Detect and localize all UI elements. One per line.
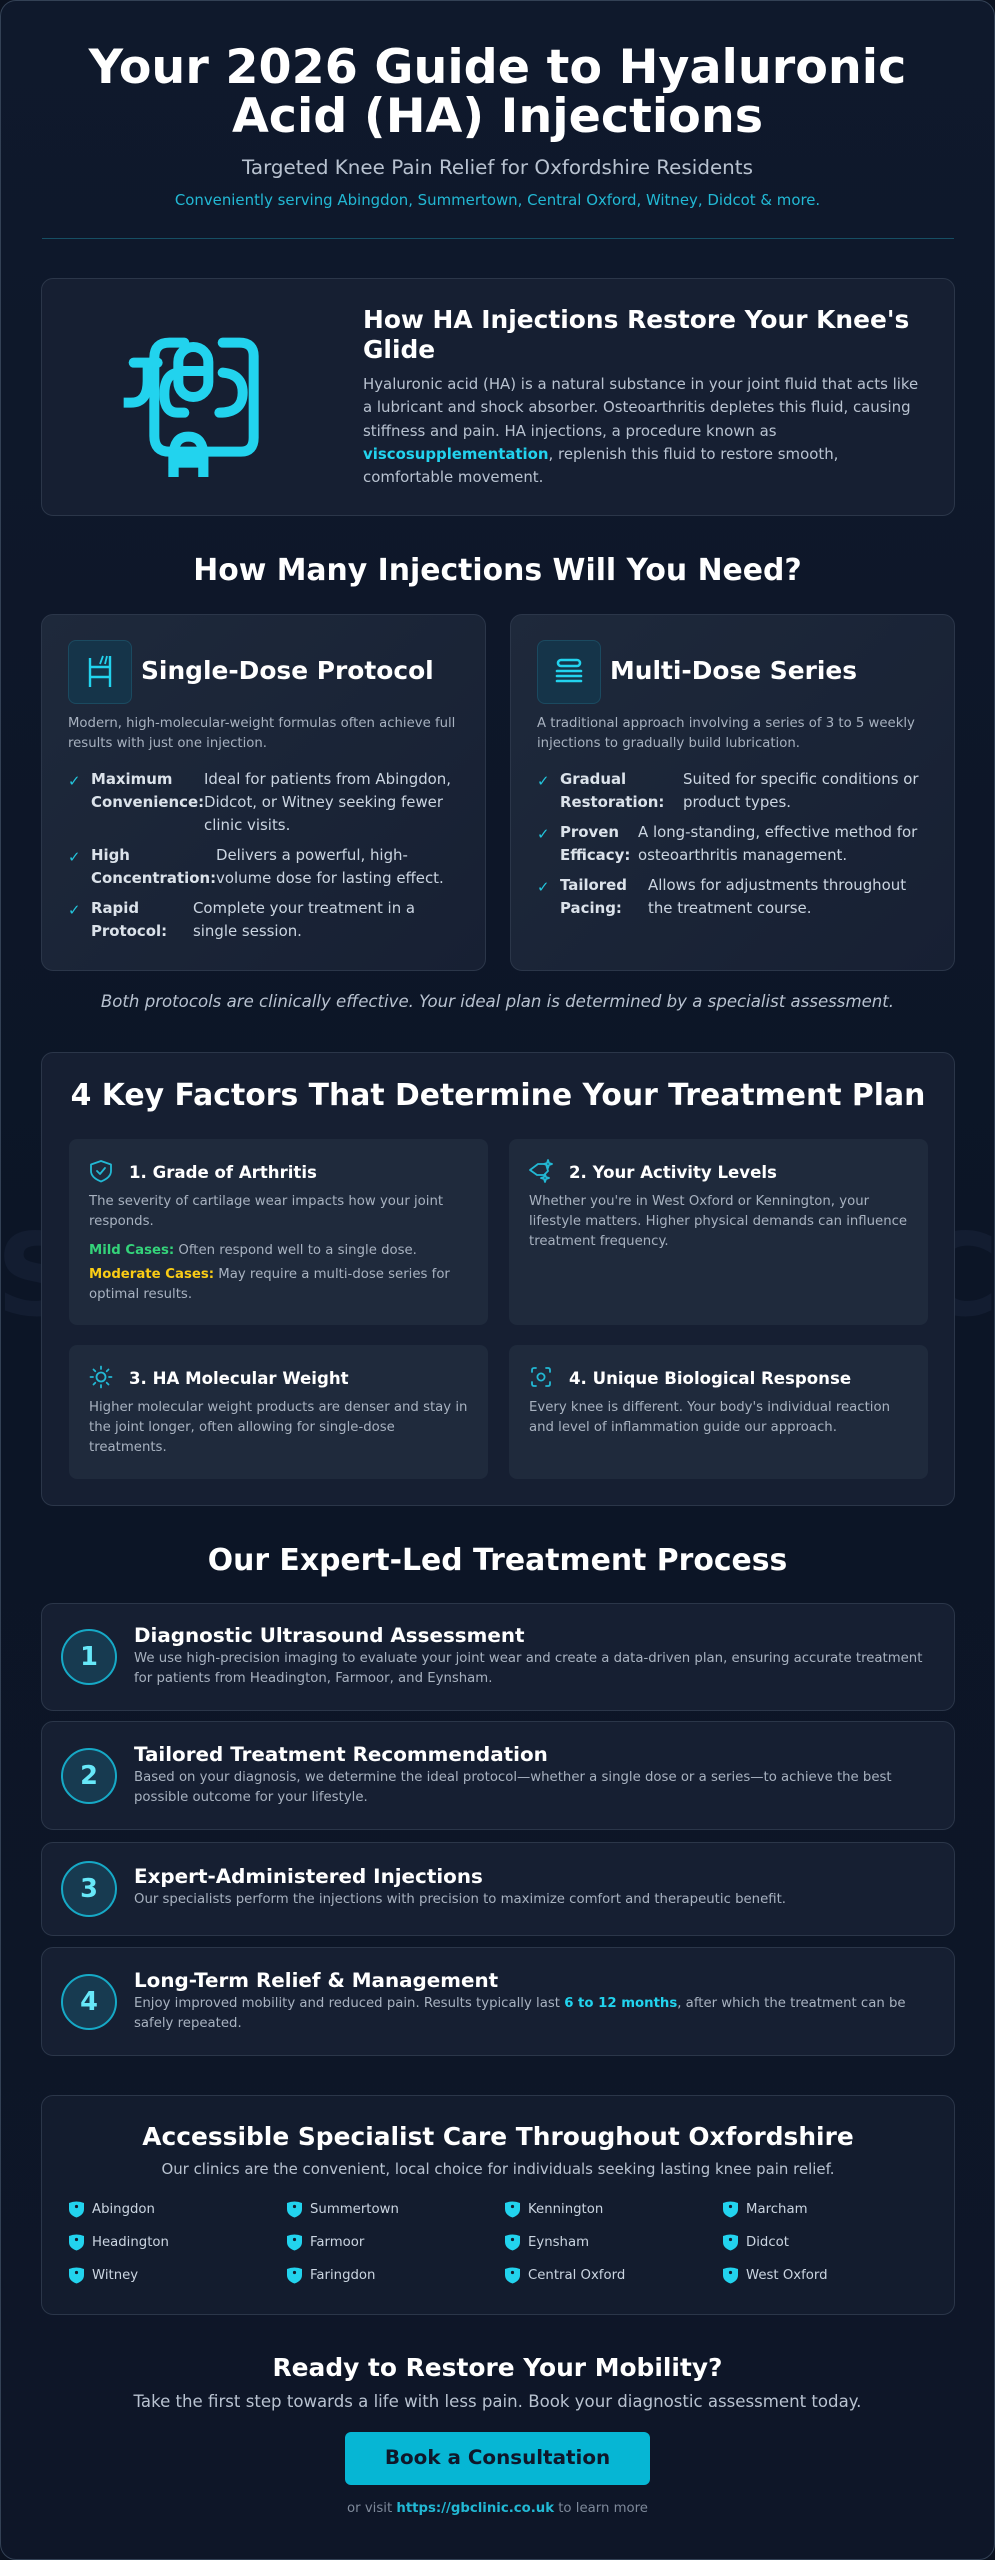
factor 4: biological response: Every knee is different. Your body's individual reaction [529, 1400, 890, 1415]
icon: molecule sun [90, 1366, 112, 1388]
factor 4: biological response: 4. Unique Biological Response [569, 1369, 851, 1388]
location: Marcham: Marcham [746, 2202, 808, 2217]
card title: Multi-Dose Series [610, 656, 857, 685]
panel heading: How HA Injections Restore Your Knee's [363, 305, 909, 334]
step text: We use high-precision imaging to evaluate your joint wear and create a data-driven plan, ensuring accurate treatment [134, 1651, 922, 1666]
factor 2: activity levels: treatment frequency. [529, 1234, 669, 1249]
factor 1: grade of arthritis: Mild Cases: Often respond well to a single dose. [89, 1243, 417, 1258]
location: Faringdon: Faringdon [310, 2268, 375, 2283]
benefit: proven efficacy: Proven [560, 823, 619, 841]
benefit: rapid protocol [68, 899, 415, 940]
step number [61, 1974, 117, 2030]
card description: injections to gradually build lubrication. [537, 736, 800, 751]
location: Witney: Witney [92, 2268, 138, 2283]
location: Didcot [723, 2234, 789, 2250]
step text: Enjoy improved mobility and reduced pain. Results typically last 6 to 12 months, after which the treatment can be [134, 1996, 906, 2011]
factor 4: biological response: and level of inflammation guide our approach. [529, 1420, 837, 1435]
benefit: gradual restoration: ✓ [537, 772, 550, 790]
location: Central Oxford: Central Oxford [528, 2268, 625, 2283]
benefit: rapid protocol: Complete your treatment in a [193, 899, 415, 917]
benefit: proven efficacy [537, 823, 918, 864]
panel: multi-dose series [510, 614, 955, 971]
step text: safely repeated. [134, 2016, 242, 2031]
panel heading: 4 Key Factors That Determine Your Treatment Plan [71, 1078, 925, 1113]
benefit: gradual restoration: Gradual [560, 770, 626, 788]
step title: Long-Term Relief & Management [134, 1969, 498, 1992]
factor 4: biological response [509, 1345, 928, 1479]
step number: 1 [80, 1642, 98, 1672]
step text: possible outcome for your lifestyle. [134, 1790, 368, 1805]
benefit: gradual restoration: Restoration: [560, 793, 664, 811]
step 4 [41, 1947, 955, 2056]
factor 1: grade of arthritis: The severity of cartilage wear impacts how your joint [89, 1194, 443, 1209]
factor 2: activity levels: lifestyle matters. Higher physical demands can influence [529, 1214, 907, 1229]
benefit: maximum convenience [68, 770, 451, 834]
step number: 2 [80, 1761, 98, 1791]
footer link text: or visit https://gbclinic.co.uk to learn more [347, 2501, 648, 2516]
step text: for patients from Headington, Farmoor, and Eynsham. [134, 1671, 492, 1686]
benefit: proven efficacy: A long-standing, effective method for [638, 823, 917, 841]
location: Headington: Headington [92, 2235, 169, 2250]
panel: how HA injections work [41, 278, 955, 516]
step number [61, 1748, 117, 1804]
location: Eynsham: Eynsham [528, 2235, 589, 2250]
benefit: high concentration: volume dose for lasting effect. [216, 869, 444, 887]
title: Acid (HA) Injections [232, 89, 763, 144]
benefit: high concentration: ✓ [68, 848, 81, 866]
benefit: maximum convenience: ✓ [68, 772, 81, 790]
factor 3: molecular weight: Higher molecular weight products are denser and stay in [89, 1400, 467, 1415]
factor 1: grade of arthritis: optimal results. [89, 1287, 192, 1302]
location: Eynsham [505, 2234, 589, 2250]
step text [134, 1651, 922, 1686]
panel heading [363, 305, 909, 364]
step title: Expert-Administered Injections [134, 1865, 483, 1888]
step title: Diagnostic Ultrasound Assessment [134, 1624, 525, 1647]
step text: Our specialists perform the injections with precision to maximize comfort and therapeutic benefit. [134, 1892, 786, 1907]
step 3 [41, 1842, 955, 1936]
card description [68, 716, 455, 751]
benefit: tailored pacing: Allows for adjustments throughout [648, 876, 906, 894]
benefit: tailored pacing: Tailored [560, 876, 627, 894]
step text: Based on your diagnosis, we determine the ideal protocol—whether a single dose or a series—to achieve the best [134, 1770, 892, 1785]
icon: knee joint [124, 338, 259, 477]
card description: results with just one injection. [68, 736, 267, 751]
factor 1: grade of arthritis [69, 1139, 488, 1325]
panel body text: a lubricant and shock absorber. Osteoarthritis depletes this fluid, causing [363, 398, 911, 416]
step number [61, 1861, 117, 1917]
location: Witney [69, 2268, 138, 2284]
step 2 [41, 1721, 955, 1830]
watermark letters [1, 1209, 994, 1342]
button: book a consultation [345, 2432, 650, 2485]
location: West Oxford: West Oxford [746, 2268, 828, 2283]
panel body text: stiffness and pain. HA injections, a procedure known as [363, 422, 777, 440]
card title: Single-Dose Protocol [141, 656, 434, 685]
benefit: maximum convenience: Ideal for patients from Abingdon, [204, 770, 451, 788]
benefit: maximum convenience: Convenience: [91, 793, 204, 811]
panel body text: Hyaluronic acid (HA) is a natural substance in your joint fluid that acts like [363, 375, 918, 393]
panel heading: Accessible Specialist Care Throughout Oxfordshire [142, 2122, 854, 2151]
panel: key factors [41, 1052, 955, 1506]
benefit: high concentration: High [91, 846, 130, 864]
panel body text: viscosupplementation, replenish this fluid to restore smooth, [363, 445, 838, 463]
step text [134, 1770, 892, 1805]
button: book a consultation: Book a Consultation [385, 2446, 610, 2469]
benefit: maximum convenience: Maximum [91, 770, 172, 788]
note: both protocols: Both protocols are clinically effective. Your ideal plan is determined by a specialist assessment. [101, 992, 894, 1011]
panel heading: Glide [363, 335, 435, 364]
benefit: rapid protocol: Rapid [91, 899, 139, 917]
subtitle: Targeted Knee Pain Relief for Oxfordshire Residents [242, 156, 753, 179]
step 1 [41, 1603, 955, 1711]
step number: 4 [80, 1987, 98, 2017]
benefit: proven efficacy: osteoarthritis management. [638, 846, 847, 864]
benefit: rapid protocol: ✓ [68, 901, 81, 919]
step title: Tailored Treatment Recommendation [134, 1743, 548, 1766]
location: Abingdon [69, 2202, 155, 2218]
panel: locations [41, 2095, 955, 2315]
factor 3: molecular weight: the joint longer, often allowing for single-dose [89, 1420, 395, 1435]
card description: A traditional approach involving a series of 3 to 5 weekly [537, 716, 915, 731]
step number [61, 1629, 117, 1685]
heading: how many injections: How Many Injections Will You Need? [193, 553, 802, 588]
location: Abingdon: Abingdon [92, 2202, 155, 2217]
location: Didcot: Didcot [746, 2235, 789, 2250]
heading: treatment process: Our Expert-Led Treatment Process [208, 1543, 787, 1578]
factor 3: molecular weight: treatments. [89, 1440, 167, 1455]
service area line: Conveniently serving Abingdon, Summertown, Central Oxford, Witney, Didcot & more. [175, 191, 820, 209]
factor 1: grade of arthritis: Moderate Cases: May require a multi-dose series for [89, 1267, 450, 1282]
icon: scan focus [531, 1367, 551, 1387]
factor 2: activity levels: Whether you're in West Oxford or Kennington, your [529, 1194, 869, 1209]
location: Farmoor: Farmoor [310, 2235, 364, 2250]
panel subtext: Our clinics are the convenient, local choice for individuals seeking lasting knee pain relief. [161, 2160, 835, 2178]
location: Kennington: Kennington [528, 2202, 603, 2217]
benefit: rapid protocol: Protocol: [91, 922, 167, 940]
benefit: high concentration: Delivers a powerful, high- [216, 846, 408, 864]
factor 3: molecular weight: 3. HA Molecular Weight [129, 1369, 349, 1388]
benefit: gradual restoration: Suited for specific conditions or [683, 770, 918, 788]
call to action text: Take the first step towards a life with less pain. Book your diagnostic assessment today. [134, 2392, 861, 2411]
factor 1: grade of arthritis: 1. Grade of Arthritis [129, 1163, 317, 1182]
card description: Modern, high-molecular-weight formulas often achieve full [68, 716, 455, 731]
benefit: gradual restoration: product types. [683, 793, 791, 811]
panel body text [363, 375, 918, 486]
factor 2: activity levels: 2. Your Activity Levels [569, 1163, 777, 1182]
location: Marcham [723, 2202, 808, 2218]
benefit: proven efficacy: Efficacy: [560, 846, 630, 864]
panel: single-dose protocol [41, 614, 486, 971]
icon: activity sparkle [529, 1159, 553, 1183]
factor 1: grade of arthritis: responds. [89, 1214, 154, 1229]
benefit: tailored pacing: Pacing: [560, 899, 622, 917]
location: Farmoor [287, 2234, 364, 2250]
factor 2: activity levels [509, 1139, 928, 1325]
factor 3: molecular weight [69, 1345, 488, 1479]
benefit: proven efficacy: ✓ [537, 825, 550, 843]
icon: multi dose [537, 640, 601, 704]
panel body text: comfortable movement. [363, 468, 543, 486]
step text [134, 1996, 906, 2031]
benefit: maximum convenience: clinic visits. [204, 816, 290, 834]
benefit: high concentration: Concentration: [91, 869, 216, 887]
call to action heading: Ready to Restore Your Mobility? [273, 2353, 722, 2382]
icon: shield check [90, 1160, 112, 1182]
title [88, 40, 906, 144]
step number: 3 [80, 1874, 98, 1904]
card description [537, 716, 915, 751]
benefit: high concentration [68, 846, 444, 887]
icon: single dose [68, 640, 132, 704]
title: Your 2026 Guide to Hyaluronic [89, 40, 906, 95]
benefit: tailored pacing [537, 876, 906, 917]
location: Summertown: Summertown [310, 2202, 399, 2217]
benefit: maximum convenience: Didcot, or Witney seeking fewer [204, 793, 443, 811]
benefit: gradual restoration [537, 770, 918, 811]
benefit: tailored pacing: ✓ [537, 878, 550, 896]
location: Faringdon [287, 2268, 375, 2284]
benefit: rapid protocol: single session. [193, 922, 302, 940]
benefit: tailored pacing: the treatment course. [648, 899, 811, 917]
